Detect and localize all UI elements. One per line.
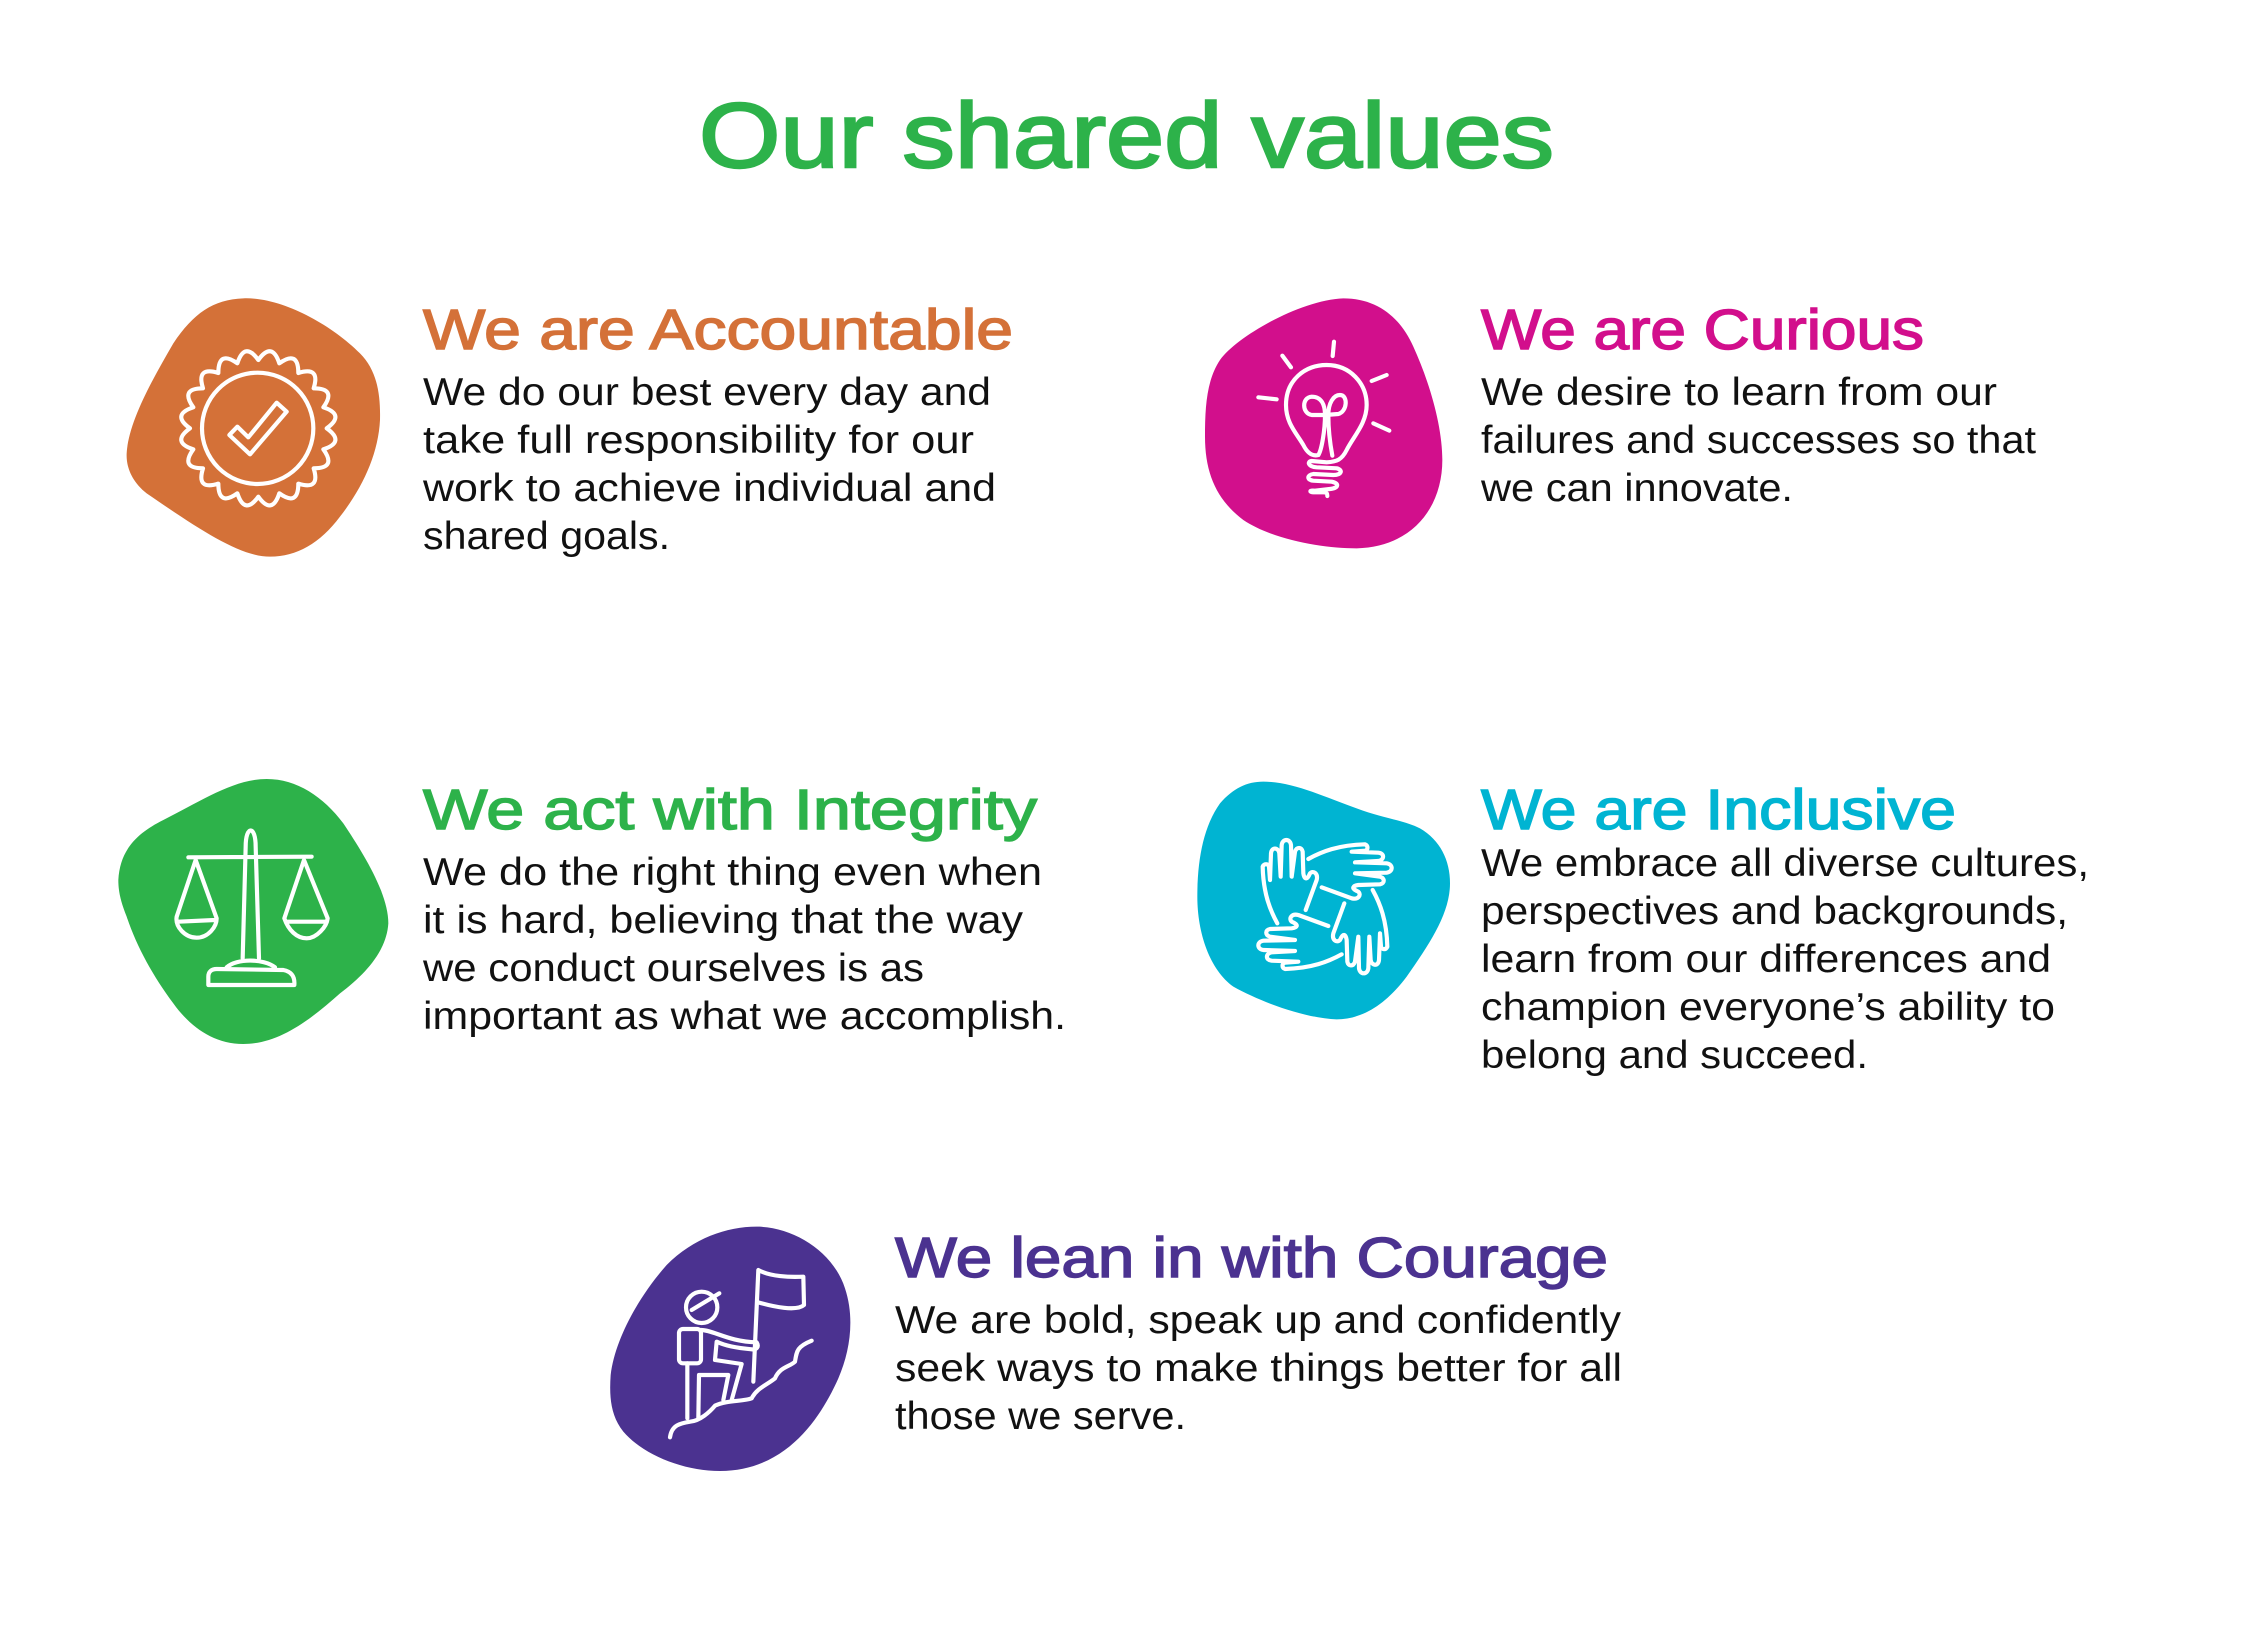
- text block: Inclusive description: learn from our differences and: [1481, 938, 2051, 981]
- text block: Inclusive description: [1481, 842, 2089, 1077]
- text block: Courage description: We are bold, speak up and confidently: [895, 1299, 1622, 1342]
- text block: Curious description: failures and successes so that: [1481, 419, 2036, 462]
- text block: Accountable description: take full responsibility for our: [423, 419, 974, 462]
- text block: Integrity description: it is hard, believing that the way: [423, 899, 1024, 942]
- panel: We are Accountable: [127, 298, 1013, 558]
- panel: We are Curious: [1205, 298, 2036, 548]
- text block: Inclusive description: champion everyone’s ability to: [1481, 986, 2055, 1029]
- heading: We lean in with Courage: We lean in with Courage: [895, 1226, 1608, 1290]
- title: Our shared values: [699, 85, 1554, 187]
- text block: Accountable description: We do our best every day and: [423, 371, 991, 414]
- text block: Curious description: We desire to learn from our: [1481, 371, 1997, 414]
- text block: Courage description: those we serve.: [895, 1395, 1186, 1438]
- panel: We act with Integrity: [118, 778, 1066, 1044]
- text block: Curious description: [1480, 371, 2036, 510]
- text block: Integrity description: We do the right thing even when: [423, 851, 1042, 894]
- text block: Integrity description: important as what we accomplish.: [423, 995, 1066, 1038]
- text block: Courage description: seek ways to make things better for all: [895, 1347, 1622, 1390]
- panel: We are Inclusive: [1197, 778, 2089, 1077]
- text block: Courage description: [895, 1299, 1622, 1438]
- text block: Accountable description: [422, 371, 996, 558]
- icon: orange blob with rosette and check mark: [127, 298, 380, 557]
- panel: We lean in with Courage: [610, 1226, 1622, 1471]
- heading: We are Accountable: We are Accountable: [423, 298, 1013, 362]
- icon: green blob with balance scales: [118, 779, 388, 1044]
- text block: Integrity description: [422, 851, 1066, 1038]
- text block: Integrity description: we conduct ourselves is as: [422, 947, 924, 990]
- icon: cyan blob with four linked hands: [1197, 782, 1450, 1019]
- text block: Curious description: we can innovate.: [1480, 467, 1793, 510]
- text block: Inclusive description: We embrace all diverse cultures,: [1481, 842, 2089, 885]
- icon: magenta blob with light bulb: [1205, 298, 1442, 548]
- text block: Inclusive description: belong and succeed.: [1481, 1034, 1868, 1077]
- icon: purple blob with climber and flag: [610, 1227, 850, 1471]
- heading: We act with Integrity: We act with Integrity: [423, 778, 1038, 842]
- text block: Accountable description: work to achieve individual and: [422, 467, 996, 510]
- heading: We are Curious: We are Curious: [1481, 298, 1924, 362]
- heading: We are Inclusive: We are Inclusive: [1481, 778, 1956, 842]
- text block: Accountable description: shared goals.: [423, 515, 670, 558]
- text block: Inclusive description: perspectives and backgrounds,: [1481, 890, 2068, 933]
